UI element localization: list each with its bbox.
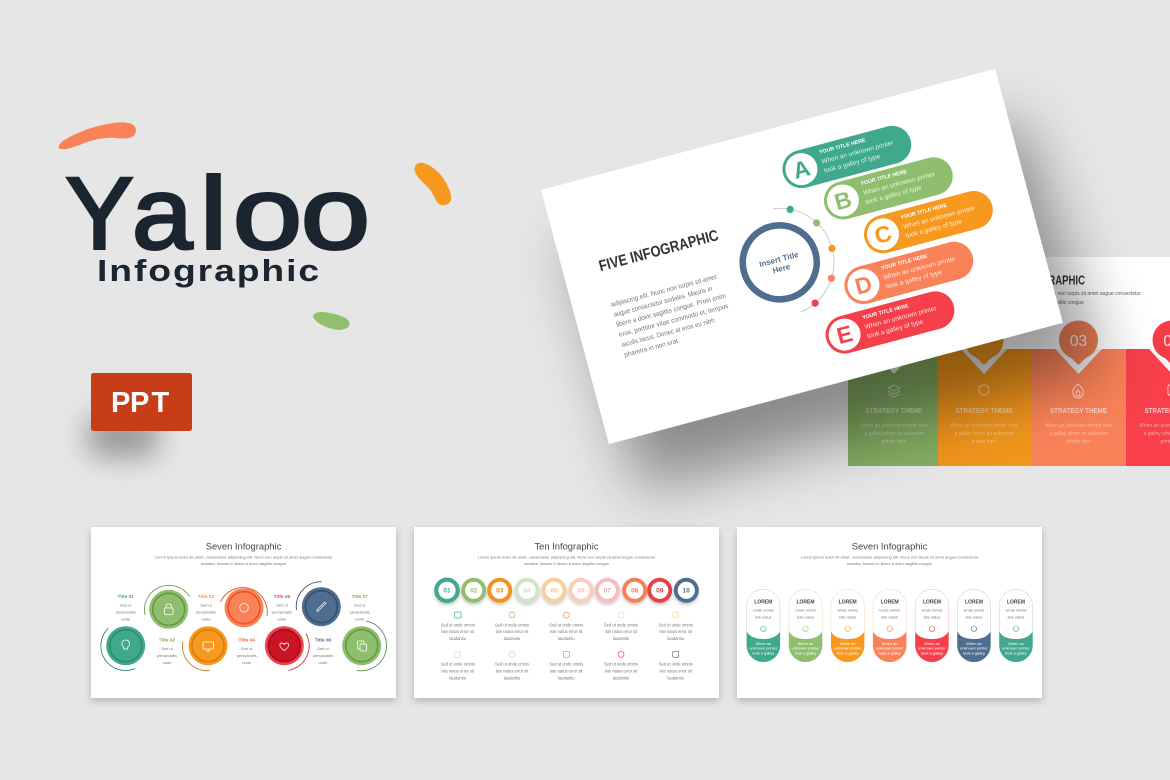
pill C: took a galley of type: [905, 218, 963, 240]
card 3 heading: Seven Infographic: [852, 540, 928, 552]
title: Yaloo: a: [132, 156, 193, 270]
pin 03: [1055, 320, 1102, 374]
capsule 1 teal: unknown printer: [749, 646, 778, 651]
decorative blob: orange stroke: [414, 163, 451, 205]
pin 04: [1149, 320, 1170, 374]
label title 04: Title 04: [238, 638, 255, 644]
text columns, row two: laudantiu: [667, 675, 684, 680]
label title 07: Title 07: [351, 594, 368, 600]
capsule 4 coral: Unde omnis: [879, 608, 900, 612]
pill A: YOUR TITLE HERE: [819, 138, 867, 156]
label title 02: Title 02: [159, 638, 176, 644]
back slide description: [1054, 291, 1141, 305]
capsule 3 orange: unknown printer: [834, 646, 862, 651]
capsule 7 teal: unknown printer: [1002, 646, 1031, 651]
PPT badge: [88, 373, 192, 457]
text columns, row one: iste natus error sit: [605, 629, 638, 634]
card 2 background: [414, 527, 719, 698]
capsule 1 teal: Unde omnis: [753, 608, 774, 612]
step 06: [568, 578, 594, 603]
capsule 4 coral: [873, 589, 906, 662]
card 2 description: sodales. Mauris in libero a dolor sagittis congue: [524, 561, 610, 566]
step 07: [595, 578, 620, 603]
text columns, row one: Sed ut unde omnis: [549, 622, 583, 627]
badge label: PPT: [111, 387, 170, 419]
title: Yaloo: o: [301, 156, 370, 270]
label title 06: perspiciatis: [313, 653, 333, 658]
central ring with title: [734, 217, 825, 308]
text columns, row one: Sed ut unde omnis: [604, 622, 638, 627]
card 1 background: [91, 527, 396, 698]
pill C: C: [872, 220, 894, 249]
text columns, row two: laudantiu: [504, 675, 520, 680]
text columns, row one: iste natus error sit: [496, 629, 529, 634]
capsule 7 teal: [999, 589, 1033, 662]
capsule 2 green: When an: [798, 641, 813, 646]
column 04 icon: [1168, 385, 1170, 395]
capsule 4 coral: When an: [882, 641, 897, 646]
step 09: [647, 578, 672, 603]
capsule 2 green: LOREM: [796, 600, 815, 606]
label title 07: perspiciatis: [350, 610, 370, 614]
text columns, row two: iste natus error sit: [550, 668, 583, 673]
capsule 1 teal: took a galley: [752, 650, 774, 655]
label title 04: [237, 638, 257, 665]
label title 01: [116, 594, 136, 622]
label title 02: unde: [163, 660, 172, 665]
capsule 1 teal: When an: [756, 641, 771, 646]
label title 07: Sed ut: [354, 602, 366, 608]
label title 05: unde: [278, 616, 287, 622]
capsule 6 blue: took a galley: [963, 650, 985, 655]
text columns, row two: Sed ut unde omnis: [659, 662, 693, 666]
label title 03: Sed ut: [200, 602, 213, 608]
label title 02: perspiciatis: [157, 653, 177, 658]
capsule 7 teal: LOREM: [1007, 600, 1025, 606]
slide body text: adipiscing elit. Nunc non turpis sit amet: [610, 274, 717, 309]
capsule 5 red: LOREM: [923, 600, 941, 606]
pill E: [821, 287, 959, 358]
decorative blob: green stroke: [313, 312, 350, 330]
capsule 3 orange: [831, 589, 864, 662]
capsule 7 teal: When an: [1008, 641, 1024, 646]
text columns, row one: laudantiu: [613, 636, 629, 641]
badge box: [91, 373, 192, 431]
pill D: took a galley of type: [885, 269, 943, 291]
capsule 3 orange: iste natus: [839, 614, 856, 620]
capsule 6 blue: unknown printer: [960, 646, 989, 651]
text columns, row two: iste natus error sit: [659, 668, 693, 673]
step 06: 06: [577, 588, 585, 595]
pill E: When an unknown printer: [864, 305, 938, 331]
column 04: red: [1126, 349, 1170, 466]
pill B: When an unknown printer: [862, 171, 937, 197]
slide body text: libero a dolor sagittis congue. Proin enim: [616, 293, 727, 329]
pill B: [820, 153, 957, 224]
card 3 description: Lorem ipsum dolor sit amet, consectetur adipiscing elit. Nunc non turpis sit amet augue consectetur: [801, 554, 979, 560]
circle 4: coral shape: [220, 588, 267, 627]
capsule 2 green: [789, 589, 822, 662]
capsule 4 coral: iste natus: [881, 614, 898, 620]
card 3 description: sodales. Mauris in libero a dolor sagittis congue: [847, 561, 933, 566]
label title 01: Sed ut: [120, 602, 132, 608]
circle 3: orange monitor: [182, 626, 228, 671]
step 08: 08: [631, 588, 639, 595]
capsule 1 teal: LOREM: [754, 600, 772, 606]
text columns, row one: iste natus error sit: [441, 629, 475, 634]
card 1 heading: Seven Infographic: [206, 540, 282, 552]
text columns, row two: Sed ut unde omnis: [441, 662, 475, 666]
connector arc with dots: [773, 196, 849, 312]
pill D: [840, 238, 978, 308]
step 08: [622, 578, 647, 603]
capsule 5 red: Unde omnis: [922, 608, 942, 612]
slide body text: iaculis lacus. Donec at eros eu nibh: [621, 317, 716, 349]
pill E: took a galley of type: [867, 318, 925, 340]
text columns, row two: [441, 662, 693, 680]
central ring with title: Here: [772, 262, 792, 275]
pin 02: [962, 338, 1007, 374]
step 10: [674, 578, 699, 603]
icons row: [454, 612, 679, 657]
label title 04: perspiciatis: [237, 653, 257, 658]
step 03: 03: [496, 588, 504, 595]
text columns, row two: Sed ut unde omnis: [495, 662, 529, 666]
text columns, row two: Sed ut unde omnis: [604, 662, 638, 666]
column 01 icon: [888, 385, 900, 397]
step 05: [542, 578, 566, 603]
label title 02: Sed ut: [161, 646, 174, 651]
pin 03: 03: [1070, 333, 1087, 350]
text columns, row one: iste natus error sit: [550, 629, 583, 634]
column 02: orange: When an unknown printer took: [950, 423, 1018, 429]
capsule 6 blue: [957, 589, 991, 662]
column 01: green: a galley when an unknown: [865, 431, 924, 437]
column 02: orange: printer type: [971, 439, 997, 445]
capsule 3 orange: When an: [840, 641, 855, 646]
capsule 4 coral: took a galley: [879, 650, 901, 655]
step 03: [487, 578, 512, 603]
label title 07: unde: [355, 616, 365, 622]
capsule 5 red: [915, 589, 949, 662]
label title 05: Sed ut: [276, 602, 289, 608]
column 02: orange: [938, 349, 1032, 466]
slide body text: pharetra in non erat.: [624, 337, 681, 359]
capsule 4 coral: unknown printer: [876, 646, 904, 651]
pill D: When an unknown printer: [883, 255, 957, 281]
pill D: YOUR TITLE HERE: [881, 254, 929, 272]
back slide heading: INFOGRAPHIC: [1018, 272, 1085, 288]
text columns, row two: iste natus error sit: [496, 668, 529, 673]
label title 06: unde: [319, 660, 328, 665]
text columns, row one: laudantiu: [667, 636, 684, 641]
step 09: 09: [656, 588, 664, 595]
capsule 3 orange: took a galley: [837, 650, 859, 655]
card 1 description: sodales. Mauris in libero a dolor sagittis congue: [201, 561, 287, 566]
pill A: [778, 122, 916, 192]
column 02 icon: [979, 385, 989, 395]
front slide shadow: [570, 120, 1105, 490]
capsule 3 orange: LOREM: [839, 600, 857, 606]
label title 02: [157, 638, 177, 665]
label title 03: [196, 594, 216, 622]
column 02: orange: STRATEGY THEME: [956, 406, 1012, 415]
column 03 icon: [1073, 384, 1083, 398]
pill C: [860, 187, 997, 258]
column 03: coral: a galley when an unknown: [1049, 431, 1108, 437]
card 1 description: [155, 554, 333, 566]
slide body text: augue consectetur sodales. Mauris in: [613, 286, 713, 319]
pill E: E: [834, 320, 855, 349]
text columns, row one: iste natus error sit: [659, 629, 693, 634]
title: Yaloo: l: [200, 156, 227, 270]
back slide white panel: [966, 257, 1170, 349]
capsule 1 teal: [747, 589, 780, 662]
back slide description: sagittis congue: [1051, 300, 1084, 306]
slide body text: [610, 273, 735, 359]
capsule 5 red: When an: [924, 641, 940, 646]
label title 03: unde: [202, 616, 211, 622]
capsule 6 blue: When an: [966, 641, 982, 646]
slide background: [541, 69, 1063, 444]
central ring with title: Insert Title: [758, 250, 800, 269]
capsule 5 red: iste natus: [924, 614, 940, 620]
slide heading: FIVE INFOGRAPHIC: [597, 227, 720, 275]
capsule 7 teal: Unde omnis: [1006, 608, 1026, 612]
label title 05: [272, 594, 292, 622]
column 01: green: STRATEGY THEME: [866, 406, 922, 415]
capsule 6 blue: Unde omnis: [964, 608, 984, 612]
card 1: seven infographic circles: [91, 527, 396, 698]
step 01: 01: [443, 588, 451, 595]
pill D: D: [852, 270, 875, 300]
card 3: seven infographic capsules: [737, 527, 1042, 698]
label title 07: [350, 594, 370, 622]
front slide: five infographic: [541, 69, 1063, 444]
card 2 description: [478, 554, 656, 566]
capsule 1 teal: iste natus: [755, 614, 772, 620]
title: Yaloo: o: [233, 156, 302, 270]
pin 01: [890, 366, 902, 374]
text columns, row two: iste natus error sit: [441, 668, 475, 673]
column 03: coral: [1032, 349, 1126, 466]
card 3 description: [801, 554, 979, 566]
label title 01: perspiciatis: [116, 610, 136, 614]
pill B: took a galley of type: [865, 184, 923, 206]
column 01: green: When an unknown printer took: [860, 423, 928, 429]
step 01: [434, 578, 460, 603]
label title 03: perspiciatis: [196, 610, 216, 614]
text columns, row one: Sed ut unde omnis: [441, 622, 475, 627]
circle 2: green lock: [144, 585, 190, 629]
step 10: 10: [683, 588, 690, 595]
card 2 description: Lorem ipsum dolor sit amet, consectetur adipiscing elit. Nunc non turpis sit amet augue consectetur: [478, 554, 656, 560]
text columns, row one: Sed ut unde omnis: [659, 622, 693, 627]
step 05: 05: [550, 588, 558, 595]
text columns, row two: iste natus error sit: [605, 668, 638, 673]
column 01: green: printer type: [881, 439, 907, 445]
card 3 background: [737, 527, 1042, 698]
text columns, row one: laudantiu: [449, 636, 466, 641]
circle 6: blue link: [296, 582, 341, 626]
text columns, row two: laudantiu: [449, 675, 466, 680]
title: Yaloo: [66, 156, 370, 270]
text columns, row one: [441, 622, 693, 641]
capsule 6 blue: iste natus: [966, 614, 982, 620]
pill A: A: [790, 154, 813, 184]
column 02: orange: a galley when an unknown: [955, 431, 1014, 437]
text columns, row one: laudantiu: [504, 636, 520, 641]
label title 03: Title 03: [198, 594, 215, 600]
subtitle: Infographic: Infographic: [97, 253, 321, 288]
step 02: 02: [470, 588, 478, 595]
capsule 3 orange: Unde omnis: [837, 608, 858, 612]
title: Yaloo: Y: [66, 156, 134, 270]
text columns, row one: Sed ut unde omnis: [495, 622, 529, 627]
label title 05: perspiciatis: [272, 610, 292, 614]
back slide: strategy theme columns: [848, 257, 1170, 466]
pill B: YOUR TITLE HERE: [860, 169, 908, 187]
pill C: When an unknown printer: [902, 205, 977, 231]
card 1 description: Lorem ipsum dolor sit amet, consectetur adipiscing elit. Nunc non turpis sit amet augue consectetur: [155, 554, 333, 560]
promotional infographic canvas: [58, 69, 1170, 704]
text columns, row one: laudantiu: [558, 636, 575, 641]
label title 04: unde: [242, 660, 252, 665]
circle 1: teal bulb: [101, 626, 145, 671]
pill A: took a galley of type: [823, 153, 881, 175]
numbered circle chain: [434, 578, 699, 603]
label title 01: Title 01: [117, 594, 134, 600]
step 04: [514, 578, 540, 603]
label title 06: [313, 638, 333, 665]
capsule 5 red: took a galley: [921, 650, 943, 655]
step 02: [461, 578, 486, 603]
column 03: coral: When an unknown printer took: [1045, 423, 1113, 429]
label title 04: Sed ut: [241, 646, 253, 651]
text columns, row two: laudantiu: [613, 675, 629, 680]
capsule 4 coral: LOREM: [881, 600, 899, 606]
pill A: When an unknown printer: [821, 139, 895, 165]
capsule 2 green: iste natus: [797, 614, 814, 620]
text columns, row two: laudantiu: [558, 675, 575, 680]
card 2 heading: Ten Infographic: [534, 540, 599, 552]
label title 06: Sed ut: [317, 646, 330, 651]
pill E: YOUR TITLE HERE: [862, 303, 910, 321]
circle 5: red heart: [265, 626, 309, 670]
step 04: 04: [523, 588, 531, 595]
capsule 5 red: unknown printer: [918, 646, 947, 651]
capsule 2 green: Unde omnis: [795, 608, 816, 612]
capsule 2 green: unknown printer: [792, 646, 820, 651]
capsule 7 teal: iste natus: [1008, 614, 1024, 620]
capsule 2 green: took a galley: [795, 650, 816, 655]
label title 06: Title 06: [315, 638, 332, 644]
back slide description: Nunc non turpis sit amet augue consectetur: [1045, 291, 1141, 297]
label title 01: unde: [121, 616, 131, 622]
label title 05: Title 05: [274, 594, 291, 600]
pill C: YOUR TITLE HERE: [900, 203, 948, 221]
decorative blob: coral stroke: [59, 122, 136, 149]
badge shadow: [88, 415, 158, 457]
column 03: coral: STRATEGY THEME: [1050, 406, 1107, 415]
step 07: 07: [604, 588, 611, 595]
capsule 6 blue: LOREM: [965, 600, 983, 606]
slide body text: eros, porttitor vitae commodo et, tempus: [618, 303, 730, 339]
capsule 7 teal: took a galley: [1005, 650, 1027, 655]
card 2: ten infographic timeline: [414, 527, 719, 698]
pill B: B: [832, 186, 854, 215]
column 01: green: [848, 349, 938, 466]
column 03: coral: printer type: [1066, 439, 1091, 445]
circle 7: green documents: [342, 621, 386, 671]
text columns, row two: Sed ut unde omnis: [549, 662, 583, 666]
